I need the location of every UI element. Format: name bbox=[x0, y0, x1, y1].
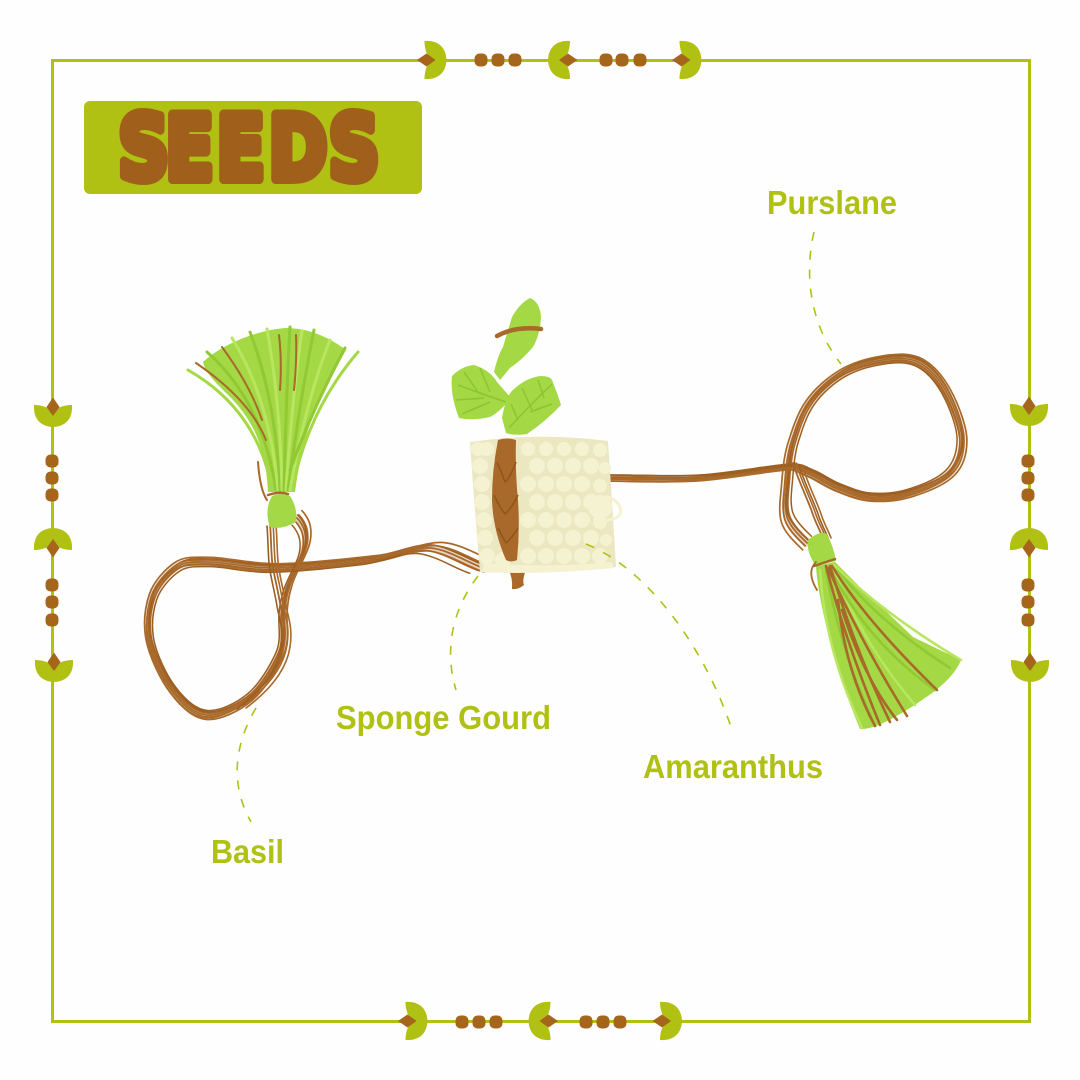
left tassel neck bbox=[267, 494, 296, 528]
title text: SEEDS bbox=[118, 97, 380, 200]
right thread loop bbox=[587, 354, 967, 550]
right tassel neck bbox=[808, 533, 836, 566]
leader: Purslane bbox=[810, 232, 841, 364]
leader: Sponge Gourd bbox=[451, 576, 478, 690]
right tassel bbox=[808, 533, 961, 729]
macrame seed pouch bbox=[470, 437, 621, 589]
title badge bbox=[84, 97, 422, 200]
pouch stub bbox=[508, 568, 526, 589]
left tassel bbox=[188, 327, 358, 528]
left ornament column bbox=[34, 398, 73, 682]
label: Sponge Gourd: Sponge Gourd bbox=[336, 699, 551, 736]
bottom ornament row bbox=[398, 1002, 682, 1040]
left tassel binding bbox=[268, 493, 288, 495]
right leaf bbox=[502, 376, 561, 435]
right tassel binding bbox=[814, 559, 835, 566]
pouch button bbox=[588, 495, 621, 520]
bud band bbox=[497, 328, 541, 336]
left leaf bbox=[452, 365, 511, 419]
left thread loop bbox=[145, 511, 502, 720]
sprout bbox=[452, 298, 561, 435]
leader: Amaranthus bbox=[586, 544, 731, 727]
brown braid bbox=[492, 438, 519, 562]
label: Purslane: Purslane bbox=[767, 184, 897, 221]
pouch body bbox=[470, 437, 616, 573]
bud bbox=[494, 298, 541, 380]
right ornament column bbox=[1010, 396, 1049, 682]
label: Basil: Basil bbox=[211, 833, 284, 870]
leader: Basil bbox=[237, 708, 256, 822]
label: Amaranthus: Amaranthus bbox=[643, 748, 823, 785]
top ornament row bbox=[417, 41, 702, 79]
